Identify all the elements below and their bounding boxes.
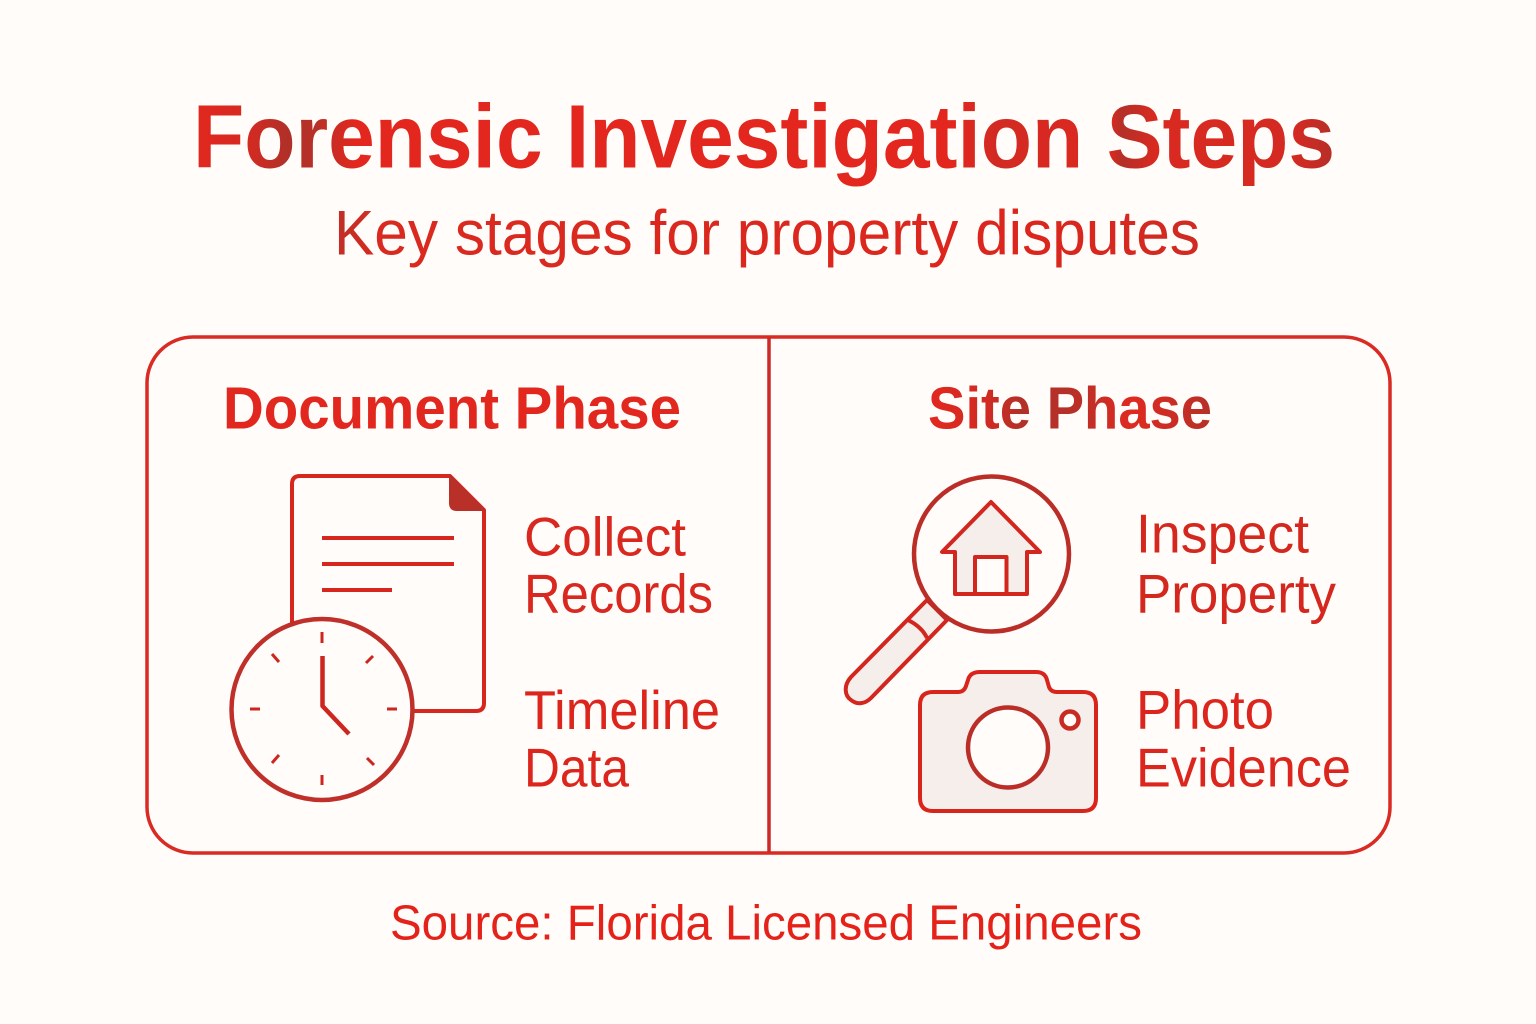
text: timeline data: Data bbox=[524, 736, 629, 798]
heading: site phase: Site Phase bbox=[928, 376, 1212, 442]
text: inspect property: Property bbox=[1136, 562, 1336, 624]
icon: camera bbox=[920, 672, 1096, 811]
title: Forensic Investigation Steps bbox=[193, 88, 1335, 188]
source note: Source: Florida Licensed Engineers bbox=[390, 896, 1142, 950]
icon: document bbox=[292, 476, 484, 711]
heading: document phase: Document Phase bbox=[223, 376, 681, 442]
text: collect records: Records bbox=[524, 562, 713, 624]
text: photo evidence: Photo bbox=[1136, 678, 1274, 740]
icon: clock bbox=[232, 619, 412, 800]
text: timeline data: Timeline bbox=[524, 679, 720, 741]
icon: magnifying glass with house bbox=[846, 476, 1069, 703]
text: photo evidence: Evidence bbox=[1136, 736, 1351, 798]
text: inspect property: Inspect bbox=[1136, 502, 1309, 564]
panel: phases container bbox=[147, 337, 1390, 853]
subtitle: Key stages for property disputes bbox=[334, 198, 1200, 268]
text: collect records: Collect bbox=[524, 506, 686, 568]
